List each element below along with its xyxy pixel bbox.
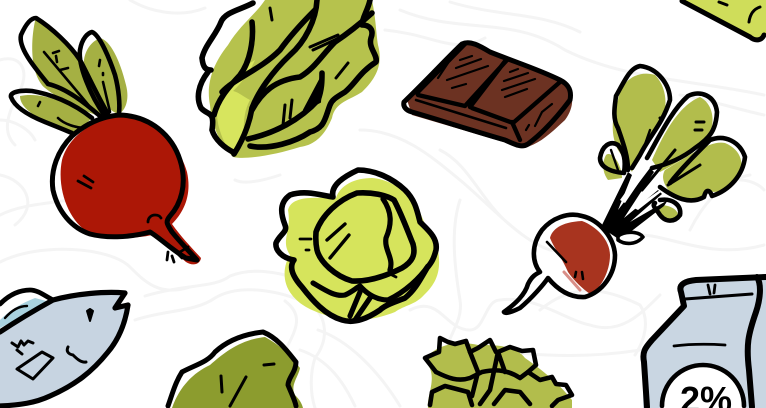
lettuce fill [209,0,380,158]
radish leaflet [618,232,643,243]
icon: cheese corner [680,0,766,40]
radish stems [602,168,668,240]
lettuce light panel [217,60,255,155]
icon: chocolate bar [404,43,572,148]
icon: romaine lettuce [198,0,380,158]
icon: cabbage [276,170,439,321]
beet root [61,116,201,264]
icon: radish [504,66,745,313]
radish bulb red [550,221,610,294]
radish leaves [603,74,742,220]
icon: beet [11,17,201,264]
icon: fish [0,290,128,408]
icon: spinach leaf [168,332,303,408]
icon: parsley [424,338,572,408]
beet leaves [20,17,127,134]
icon: milk carton [643,277,766,408]
parsley fill [424,343,572,408]
radish bulb outline [504,215,615,313]
